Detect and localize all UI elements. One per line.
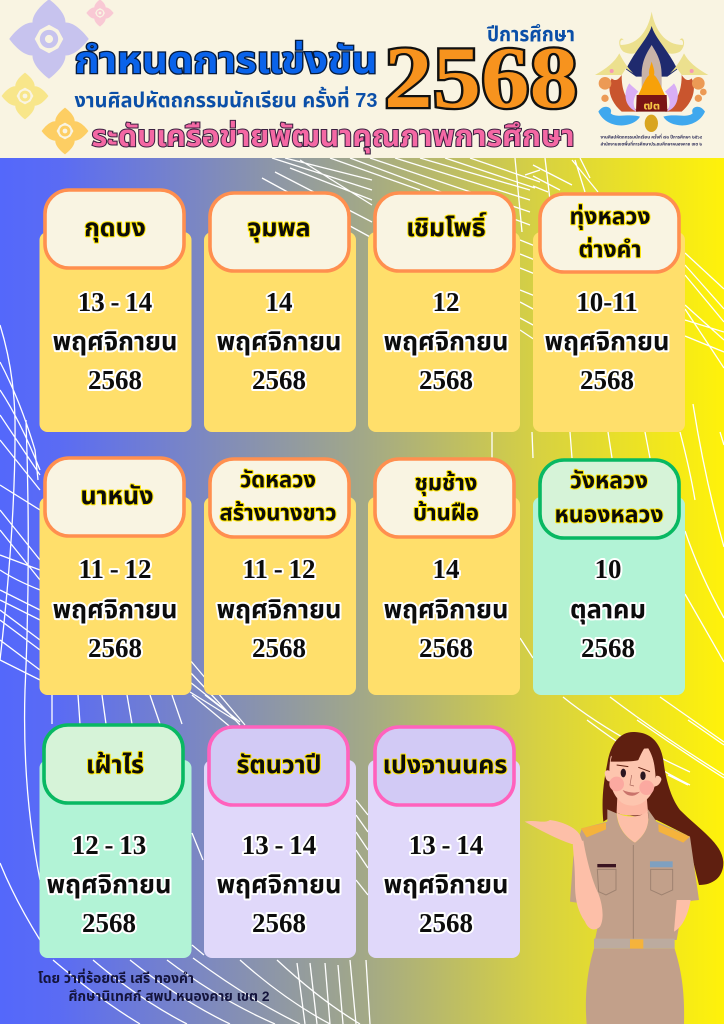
card: วัดหลวง สร้างนางขาว: พฤศจิกายน (217, 596, 341, 624)
card: ชุมช้าง บ้านฝือ: พฤศจิกายน (384, 596, 508, 624)
card: ชุมช้าง บ้านฝือ: 2568 (419, 633, 473, 663)
card: ชุมช้าง บ้านฝือ (368, 459, 520, 695)
card: จุมพล: 14 (266, 287, 292, 317)
card: นาหนัง: 11 - 12 (78, 554, 152, 584)
card: เปงจานนคร: 2568 (419, 908, 473, 938)
card: วัดหลวง สร้างนางขาว: 2568 (252, 633, 306, 663)
card: เชิมโพธิ์: เชิมโพธิ์ (406, 211, 487, 242)
card: วังหลวง หนองหลวง: 10 (594, 554, 622, 584)
card: เฝ้าไร่: 2568 (82, 908, 136, 938)
card: เฝ้าไร่: พฤศจิกายน (47, 871, 171, 899)
card: กุดบง: พฤศจิกายน (53, 328, 177, 356)
card: รัตนวาปี (204, 727, 356, 958)
card: ทุ่งหลวง ต่างคำ: 2568 (580, 365, 634, 395)
card: จุมพล: 2568 (252, 365, 306, 395)
card: เชิมโพธิ์: 12 (432, 287, 460, 317)
card: นาหนัง: 2568 (88, 633, 142, 663)
card: ทุ่งหลวง ต่างคำ: ทุ่งหลวง (570, 203, 650, 230)
card: วังหลวง หนองหลวง: 2568 (581, 633, 635, 663)
year 2568: 2568 (384, 30, 578, 127)
icon: temple logo (595, 12, 708, 146)
card: กุดบง: 13 - 14 (78, 287, 152, 317)
card: วังหลวง หนองหลวง: หนองหลวง (555, 501, 663, 527)
card: จุมพล (204, 193, 356, 432)
footer credit: ศึกษานิเทศก์ สพป.หนองคาย เขต 2 (68, 988, 270, 1004)
card: รัตนวาปี: 13 - 14 (242, 830, 316, 860)
card: วังหลวง หนองหลวง (533, 460, 685, 695)
icon: temple logo: ๗๓ (643, 98, 660, 112)
icon: yellow flower ornament (2, 73, 48, 119)
icon: large lavender flower ornament (9, 0, 89, 79)
card: เชิมโพธิ์: 2568 (419, 365, 473, 395)
card: รัตนวาปี: 2568 (252, 908, 306, 938)
card: เชิมโพธิ์ (368, 193, 520, 432)
card: กุดบง: กุดบง (84, 214, 146, 243)
card: วังหลวง หนองหลวง: วังหลวง (570, 467, 648, 493)
card: ชุมช้าง บ้านฝือ: ชุมช้าง (415, 470, 477, 496)
icon: orange flower ornament (42, 108, 88, 154)
header band (0, 0, 724, 158)
subtitle: network level: ระดับเครือข่ายพัฒนาคุณภาพการศึกษา (92, 121, 574, 153)
title: กำหนดการแข่งขัน (74, 40, 378, 81)
card: วัดหลวง สร้างนางขาว: สร้างนางขาว (219, 500, 337, 525)
footer credit (38, 968, 270, 1004)
card: เปงจานนคร (368, 727, 520, 958)
card: วัดหลวง สร้างนางขาว: วัดหลวง (240, 467, 316, 492)
card: วัดหลวง สร้างนางขาว (204, 459, 356, 695)
card: เชิมโพธิ์: พฤศจิกายน (384, 328, 508, 356)
card: นาหนัง: นาหนัง (80, 482, 154, 510)
card: กุดบง: 2568 (88, 365, 142, 395)
icon: pink flower ornament (86, 0, 114, 27)
card: เปงจานนคร: เปงจานนคร (383, 751, 507, 779)
card: ทุ่งหลวง ต่างคำ (533, 194, 685, 432)
footer credit: โดย ว่าที่ร้อยตรี เสรี ทองคำ (38, 968, 194, 986)
icon: temple logo: สำนักงานเขตพื้นที่การศึกษาประถมศึกษาหนองคาย เขต ๒ (600, 140, 702, 146)
card: ทุ่งหลวง ต่างคำ: ต่างคำ (578, 236, 642, 262)
card: นาหนัง (40, 458, 192, 695)
card: เฝ้าไร่: เฝ้าไร่ (86, 751, 144, 779)
card: ชุมช้าง บ้านฝือ: บ้านฝือ (413, 500, 479, 525)
label: academic year: ปีการศึกษา (487, 24, 575, 46)
card: ชุมช้าง บ้านฝือ: 14 (432, 554, 460, 584)
card: รัตนวาปี: พฤศจิกายน (217, 871, 341, 899)
subtitle: event name: งานศิลปหัตถกรรมนักเรียน ครั้งที่ 73 (74, 86, 378, 112)
icon: temple logo: งานศิลปหัตถกรรมนักเรียน ครั้งที่ ๗๓ ปีการศึกษา ๒๕๖๘ (600, 134, 702, 140)
card: เฝ้าไร่: 12 - 13 (72, 830, 146, 860)
card: จุมพล: จุมพล (247, 214, 311, 243)
card: เฝ้าไร่ (40, 725, 192, 958)
card: รัตนวาปี: รัตนวาปี (236, 751, 322, 779)
card: วัดหลวง สร้างนางขาว: 11 - 12 (242, 554, 316, 584)
card: กุดบง (40, 190, 192, 432)
card: เปงจานนคร: พฤศจิกายน (384, 871, 508, 899)
card: จุมพล: พฤศจิกายน (217, 328, 341, 356)
card: ทุ่งหลวง ต่างคำ: พฤศจิกายน (545, 328, 669, 356)
card: วังหลวง หนองหลวง: ตุลาคม (570, 596, 646, 625)
card: ทุ่งหลวง ต่างคำ: 10-11 (576, 287, 638, 317)
card: นาหนัง: พฤศจิกายน (53, 596, 177, 624)
card: เปงจานนคร: 13 - 14 (409, 830, 483, 860)
illustration: teacher in khaki uniform (525, 732, 723, 1024)
